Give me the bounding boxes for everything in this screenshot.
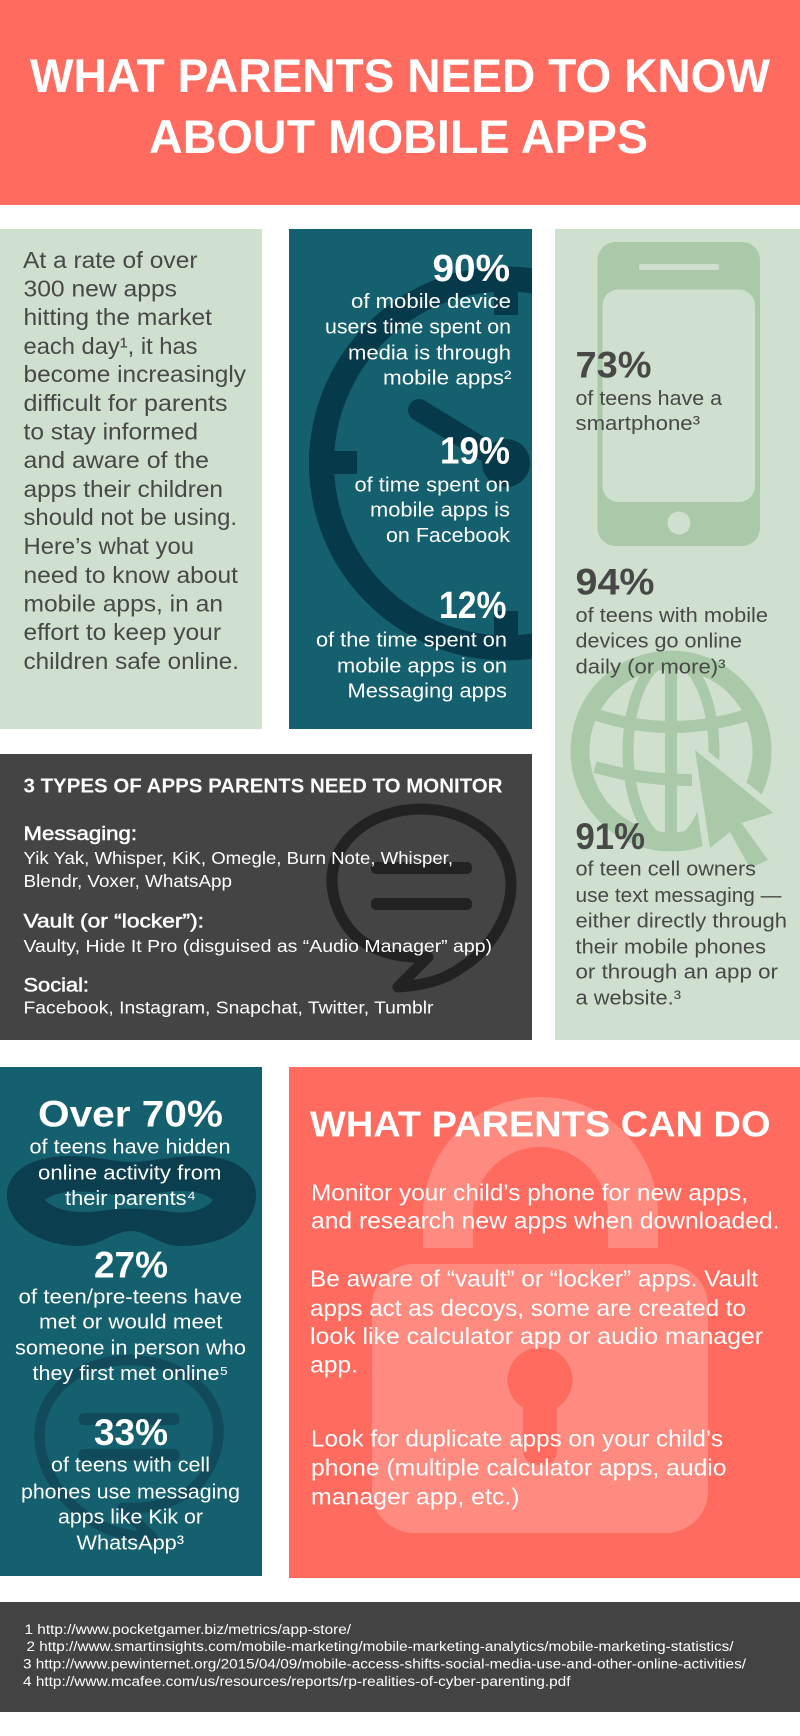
intro text block	[23, 247, 247, 674]
stat: 91 percent	[576, 816, 787, 1010]
source list	[23, 1622, 746, 1689]
app list: messaging: Blendr, Voxer, WhatsApp	[24, 871, 232, 891]
advice: vault apps	[310, 1266, 763, 1378]
stat: 33 percent	[21, 1412, 240, 1554]
panel: intro	[0, 229, 262, 729]
stat: 33 percent: 33%	[94, 1412, 168, 1453]
title: WHAT PARENTS NEED TO KNOW	[30, 49, 771, 102]
stat: 19 percent: on Facebook	[386, 524, 511, 547]
stat: 33 percent: of teens with cell	[51, 1454, 210, 1476]
app list: messaging: Messaging:	[24, 824, 137, 845]
app list: social: Facebook, Instagram, Snapchat, Twitter, Tumblr	[24, 998, 434, 1018]
source list: 1 http://www.pocketgamer.biz/metrics/app-store/	[24, 1622, 351, 1637]
stat: over 70 percent	[30, 1094, 230, 1210]
heading: WHAT PARENTS CAN DO	[310, 1104, 770, 1144]
advice: monitor: Monitor your child’s phone for new apps,	[311, 1180, 748, 1206]
intro text block: mobile apps, in an	[24, 590, 223, 616]
stat: 90 percent: of mobile device	[351, 290, 511, 313]
intro text block: should not be using.	[24, 504, 237, 530]
stat: 91 percent: their mobile phones	[576, 936, 766, 958]
stat: 91 percent: or through an app or	[576, 962, 778, 984]
intro text block: Here’s what you	[24, 533, 194, 559]
stat: over 70 percent: of teens have hidden	[30, 1136, 230, 1158]
stat: 33 percent: WhatsApp³	[76, 1532, 184, 1554]
stat: 91 percent: either directly through	[576, 910, 787, 932]
stat: over 70 percent: Over 70%	[38, 1094, 223, 1134]
stat: 12 percent: 12%	[439, 585, 506, 627]
advice: vault apps: Be aware of “vault” or “locker” apps. Vault	[310, 1266, 759, 1292]
stat: 94 percent: 94%	[576, 562, 654, 602]
title banner	[0, 0, 800, 205]
stat: 27 percent: someone in person who	[15, 1336, 246, 1360]
stat: 73 percent: 73%	[576, 344, 652, 386]
stat: 94 percent: of teens with mobile	[576, 605, 768, 627]
stat: 90 percent: mobile apps²	[383, 366, 512, 390]
advice: vault apps: apps act as decoys, some are created to	[310, 1295, 746, 1321]
app list: vault: Vaulty, Hide It Pro (disguised as “Audio Manager” app)	[24, 936, 492, 956]
stat: 94 percent	[576, 562, 768, 678]
advice: vault apps: look like calculator app or audio manager	[310, 1323, 763, 1349]
intro text block: children safe online.	[24, 648, 239, 674]
source list: 4 http://www.mcafee.com/us/resources/reports/rp-realities-of-cyber-parenting.pdf	[23, 1674, 571, 1689]
stat: 12 percent: Messaging apps	[348, 680, 507, 702]
app list: vault	[24, 912, 492, 956]
app list: social: Social:	[24, 976, 89, 996]
advice: duplicate apps: phone (multiple calculator apps, audio	[311, 1454, 726, 1480]
intro text block: become increasingly	[24, 361, 247, 387]
icon: speech bubble	[332, 809, 511, 987]
stat: 12 percent: mobile apps is on	[337, 654, 507, 678]
intro text block: each day¹, it has	[24, 333, 198, 359]
stat: over 70 percent: online activity from	[38, 1162, 222, 1184]
stat: 19 percent: of time spent on	[354, 474, 510, 496]
stat: 19 percent: mobile apps is	[370, 498, 510, 522]
intro text block: difficult for parents	[24, 390, 228, 416]
stat: 73 percent: of teens have a	[576, 388, 723, 410]
stat: 73 percent	[576, 344, 723, 435]
advice: vault apps: app.	[310, 1352, 358, 1378]
icon: speech bubble outline	[40, 1360, 218, 1538]
intro text block: hitting the market	[24, 304, 213, 330]
advice: duplicate apps: manager app, etc.)	[311, 1484, 520, 1510]
intro text block: to stay informed	[24, 418, 198, 444]
heading: 3 TYPES OF APPS PARENTS NEED TO MONITOR	[24, 774, 503, 798]
app list: vault: Vault (or “locker”):	[24, 912, 204, 932]
stat: 12 percent: of the time spent on	[316, 628, 507, 652]
intro text block: apps their children	[24, 476, 223, 502]
app list: social	[24, 976, 434, 1018]
panel: time spent stats	[289, 229, 532, 729]
advice: duplicate apps	[311, 1426, 726, 1510]
icon: smartphone	[598, 242, 760, 546]
title: ABOUT MOBILE APPS	[149, 110, 648, 163]
stat: 91 percent: use text messaging —	[576, 885, 782, 907]
app list: messaging	[24, 824, 453, 891]
panel: teen device stats	[555, 229, 800, 1040]
panel: what parents can do	[289, 1067, 800, 1578]
title	[30, 49, 771, 163]
stat: 27 percent: 27%	[94, 1244, 168, 1286]
stat: 27 percent: they first met online⁵	[32, 1362, 228, 1385]
stat: 91 percent: 91%	[576, 816, 645, 857]
stat: 33 percent: phones use messaging	[21, 1480, 240, 1504]
advice: duplicate apps: Look for duplicate apps on your child’s	[311, 1426, 723, 1452]
intro text block: At a rate of over	[23, 247, 198, 273]
icon: clock	[309, 266, 532, 660]
icon: padlock	[372, 1122, 708, 1533]
advice: monitor: and research new apps when downloaded.	[311, 1208, 780, 1234]
app list: messaging: Yik Yak, Whisper, KiK, Omegle, Burn Note, Whisper,	[24, 848, 453, 868]
intro text block: and aware of the	[24, 447, 209, 473]
source list: 2 http://www.smartinsights.com/mobile-marketing/mobile-marketing-analytics/mobile-marketing-statistics/	[26, 1639, 734, 1654]
stat: 94 percent: daily (or more)³	[576, 656, 726, 678]
icon: globe with cursor	[580, 659, 774, 868]
stat: 90 percent: users time spent on	[325, 316, 511, 338]
stat: over 70 percent: their parents⁴	[65, 1187, 196, 1210]
icon: mask	[7, 1156, 256, 1246]
stat: 12 percent	[316, 585, 507, 702]
stat: 27 percent: met or would meet	[39, 1310, 223, 1334]
panel: types of apps	[0, 754, 532, 1040]
source list: 3 http://www.pewinternet.org/2015/04/09/mobile-access-shifts-social-media-use-and-other-online-activities/	[23, 1656, 746, 1672]
stat: 90 percent	[325, 248, 512, 390]
stat: 90 percent: media is through	[348, 342, 511, 364]
stat: 91 percent: a website.³	[576, 988, 681, 1010]
stat: 91 percent: of teen cell owners	[576, 858, 756, 880]
stat: 27 percent: of teen/pre-teens have	[18, 1286, 242, 1308]
stat: 73 percent: smartphone³	[576, 413, 700, 435]
intro text block: effort to keep your	[24, 619, 221, 645]
advice: monitor	[311, 1180, 780, 1234]
panel: teen behaviour stats	[0, 1067, 262, 1576]
stat: 94 percent: devices go online	[576, 630, 742, 652]
stat: 19 percent: 19%	[440, 430, 510, 472]
panel: footnotes	[0, 1602, 800, 1712]
stat: 90 percent: 90%	[432, 248, 510, 290]
intro text block: 300 new apps	[24, 276, 177, 302]
stat: 27 percent	[15, 1244, 246, 1385]
stat: 19 percent	[354, 430, 511, 547]
stat: 33 percent: apps like Kik or	[58, 1506, 203, 1528]
intro text block: need to know about	[24, 562, 239, 588]
